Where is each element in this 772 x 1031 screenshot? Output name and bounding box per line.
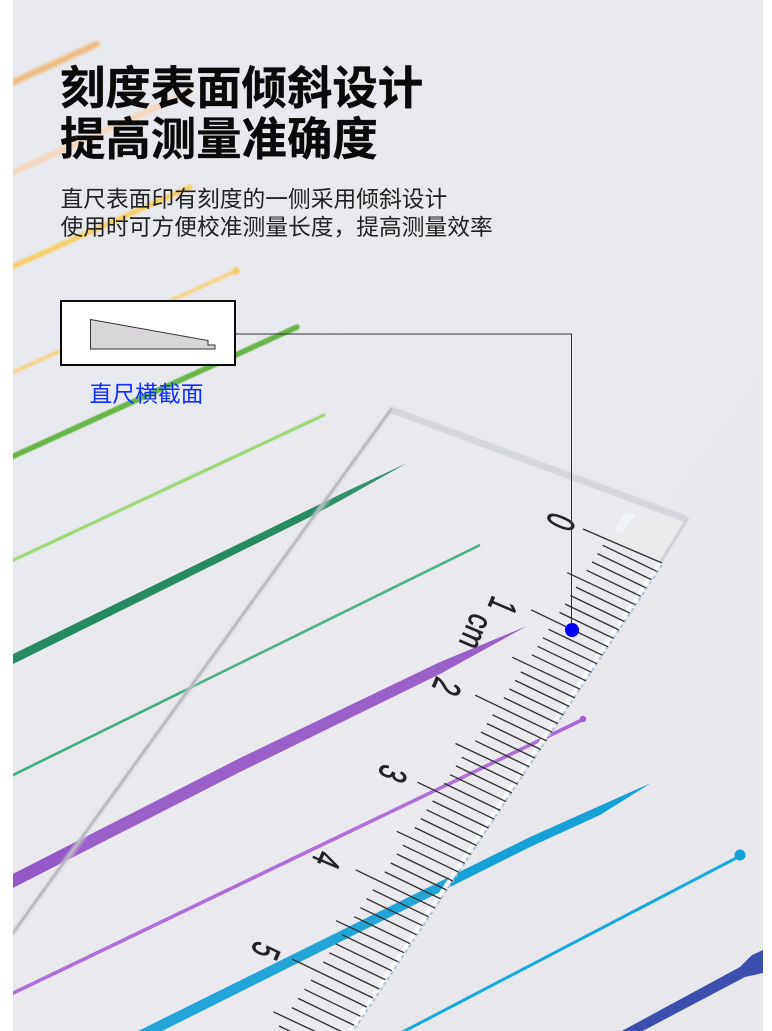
ruler numerals: 5 (243, 936, 289, 966)
pen line: thin blue (395, 856, 740, 1031)
ruler numerals: 1 (480, 591, 526, 621)
ruler numerals (243, 507, 584, 966)
pen lines: orange (5, 44, 190, 176)
title: 刻度表面倾斜设计 (60, 62, 423, 114)
icon: ruler cross-section profile (90, 318, 216, 350)
ruler top edge (392, 410, 686, 519)
title (60, 62, 423, 164)
pen line: thick purple (5, 626, 527, 892)
ruler numerals: 3 (370, 759, 416, 789)
pen lines: green (5, 327, 324, 564)
cross-section caption: 直尺横截面 (90, 381, 203, 407)
pen line: thin green (5, 545, 480, 779)
pen line: dark green (5, 463, 407, 668)
cross-section diagram box (60, 300, 236, 366)
leader line from cross-section to ruler (235, 334, 572, 630)
ruler body (10, 407, 688, 1031)
pen line: thin purple (5, 719, 584, 997)
ruler left edge (40, 416, 390, 898)
ruler numerals: 4 (304, 845, 350, 875)
ruler tick marks (273, 529, 662, 1031)
blue marker dot (565, 623, 579, 637)
ruler numerals: 2 (424, 672, 470, 702)
pen line: thick blue (130, 783, 651, 1031)
ruler corner (610, 512, 680, 560)
ruler numerals: 0 (538, 507, 584, 537)
title: 提高测量准确度 (60, 114, 378, 164)
ruler bevel edge (350, 563, 660, 1031)
ruler numerals: cm (451, 608, 499, 655)
body text (60, 186, 493, 240)
pen line: navy (618, 950, 763, 1031)
pen lines: yellow (5, 187, 240, 376)
body text: 使用时可方便校准测量长度，提高测量效率 (60, 214, 493, 240)
body text: 直尺表面印有刻度的一侧采用倾斜设计 (60, 186, 447, 212)
